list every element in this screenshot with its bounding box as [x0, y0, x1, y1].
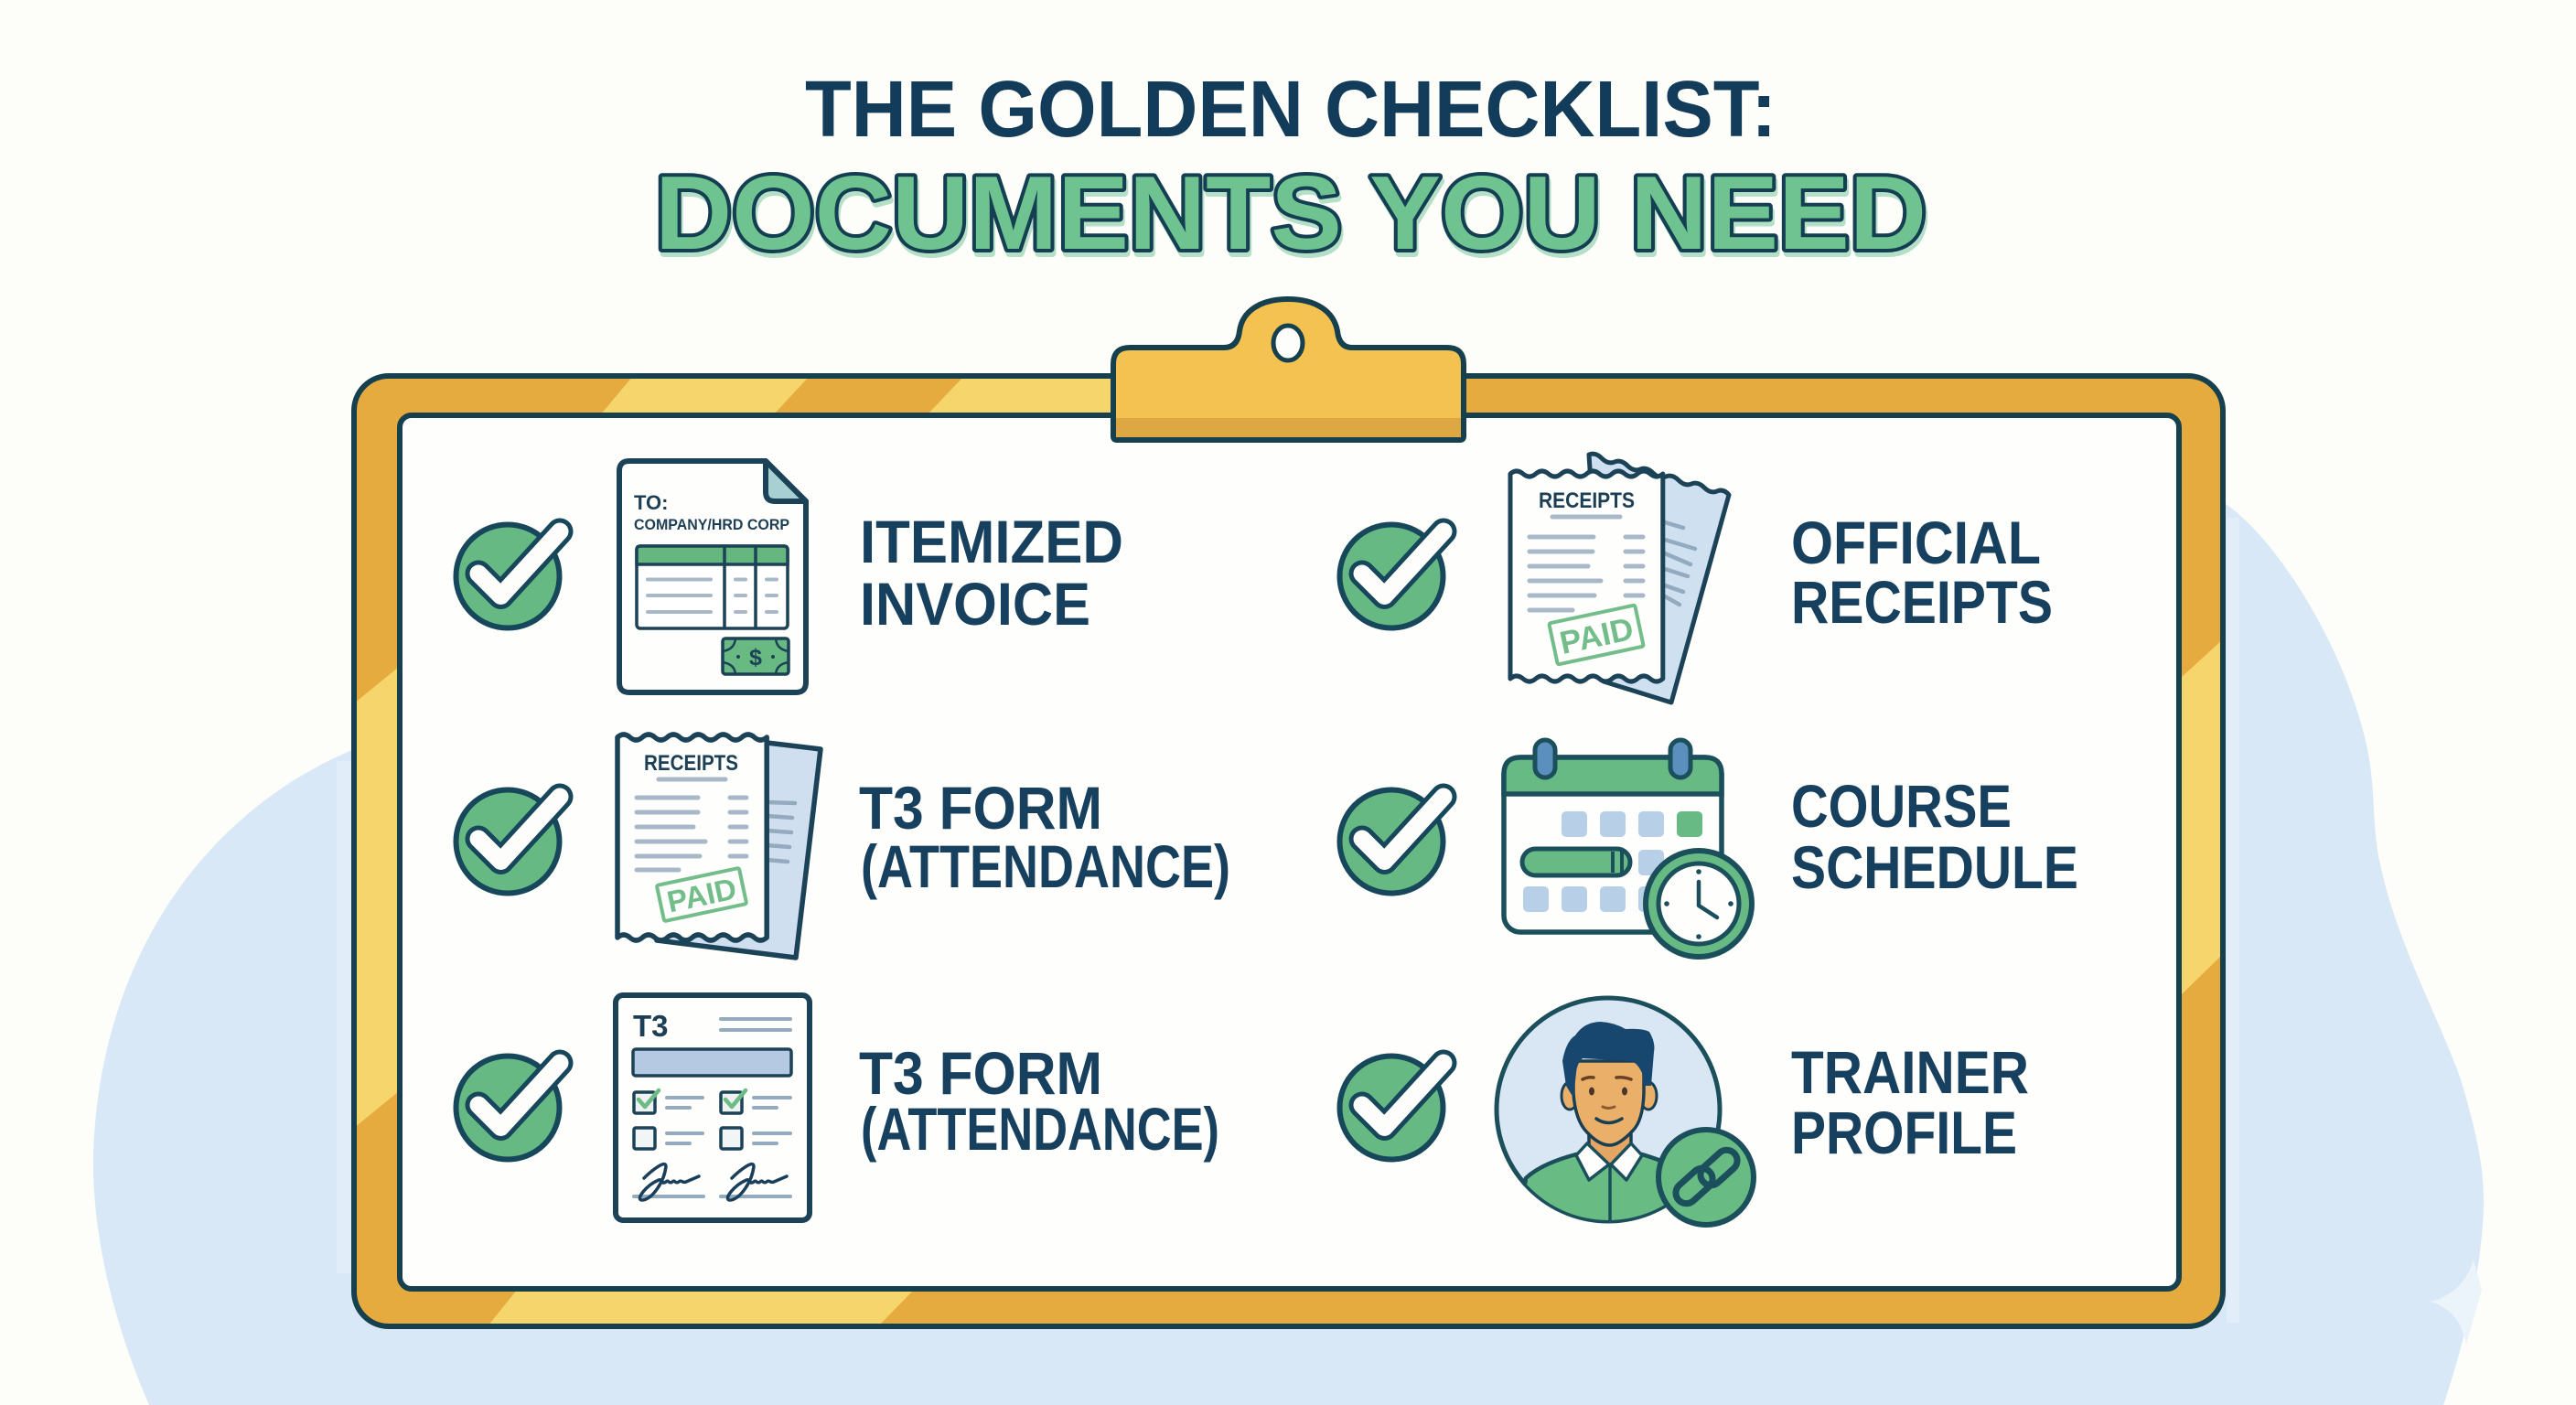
icon: calendar with clock	[1504, 740, 1752, 957]
label: COURSE	[1791, 772, 2012, 840]
clock badge	[1646, 851, 1752, 957]
label: ITEMIZED	[860, 508, 1123, 575]
title line 1: THE GOLDEN CHECKLIST:	[805, 65, 1776, 154]
clipboard	[354, 299, 2223, 1326]
item: official receipts	[1339, 454, 2053, 702]
label	[1791, 772, 2078, 901]
title line 2: DOCUMENTS YOU NEED	[655, 156, 1927, 272]
icon: invoice document: TO:	[634, 491, 668, 514]
icon: receipts	[617, 735, 821, 958]
label: (ATTENDANCE)	[861, 1095, 1219, 1163]
icon: t3 form: T3	[633, 1009, 669, 1043]
check mark	[456, 1056, 560, 1160]
icon: official receipts	[1510, 454, 1729, 702]
background blue blob	[93, 504, 2484, 1405]
clipboard frame	[354, 376, 2223, 1326]
label: T3 FORM	[859, 774, 1102, 842]
icon: trainer avatar	[1497, 998, 1754, 1226]
icon: t3 form	[616, 995, 810, 1220]
label: TRAINER	[1791, 1038, 2029, 1106]
label	[860, 508, 1123, 638]
item: t3 form row 2	[456, 735, 1230, 958]
link badge	[1658, 1130, 1754, 1225]
icon: invoice document	[619, 461, 806, 692]
check mark	[1339, 525, 1444, 627]
title	[655, 65, 1927, 272]
stamp: paid: PAID	[664, 871, 739, 919]
icon: official receipts: RECEIPTS	[1539, 488, 1635, 513]
label	[859, 774, 1230, 900]
label: SCHEDULE	[1791, 833, 2078, 901]
label	[1791, 1038, 2029, 1166]
label	[1791, 509, 2053, 636]
item: t3 form row 3	[456, 995, 1219, 1220]
label: INVOICE	[860, 570, 1090, 638]
icon: invoice document: COMPANY/HRD CORP	[634, 517, 789, 533]
check mark	[1339, 790, 1444, 893]
item: course schedule	[1339, 740, 2078, 957]
check mark	[1339, 1056, 1444, 1160]
icon: invoice document: $	[749, 645, 762, 670]
check mark	[456, 790, 560, 893]
label: OFFICIAL	[1791, 509, 2041, 576]
icon: receipts: RECEIPTS	[644, 751, 738, 776]
label: (ATTENDANCE)	[861, 832, 1230, 900]
check mark	[456, 525, 560, 627]
label: PROFILE	[1791, 1099, 2017, 1166]
item: itemized invoice	[456, 461, 1123, 692]
stamp: paid: PAID	[1557, 611, 1637, 661]
label: T3 FORM	[859, 1039, 1102, 1107]
label	[859, 1039, 1219, 1163]
clipboard clip	[1113, 299, 1464, 440]
label: RECEIPTS	[1791, 568, 2053, 636]
item: trainer profile	[1339, 998, 2029, 1226]
